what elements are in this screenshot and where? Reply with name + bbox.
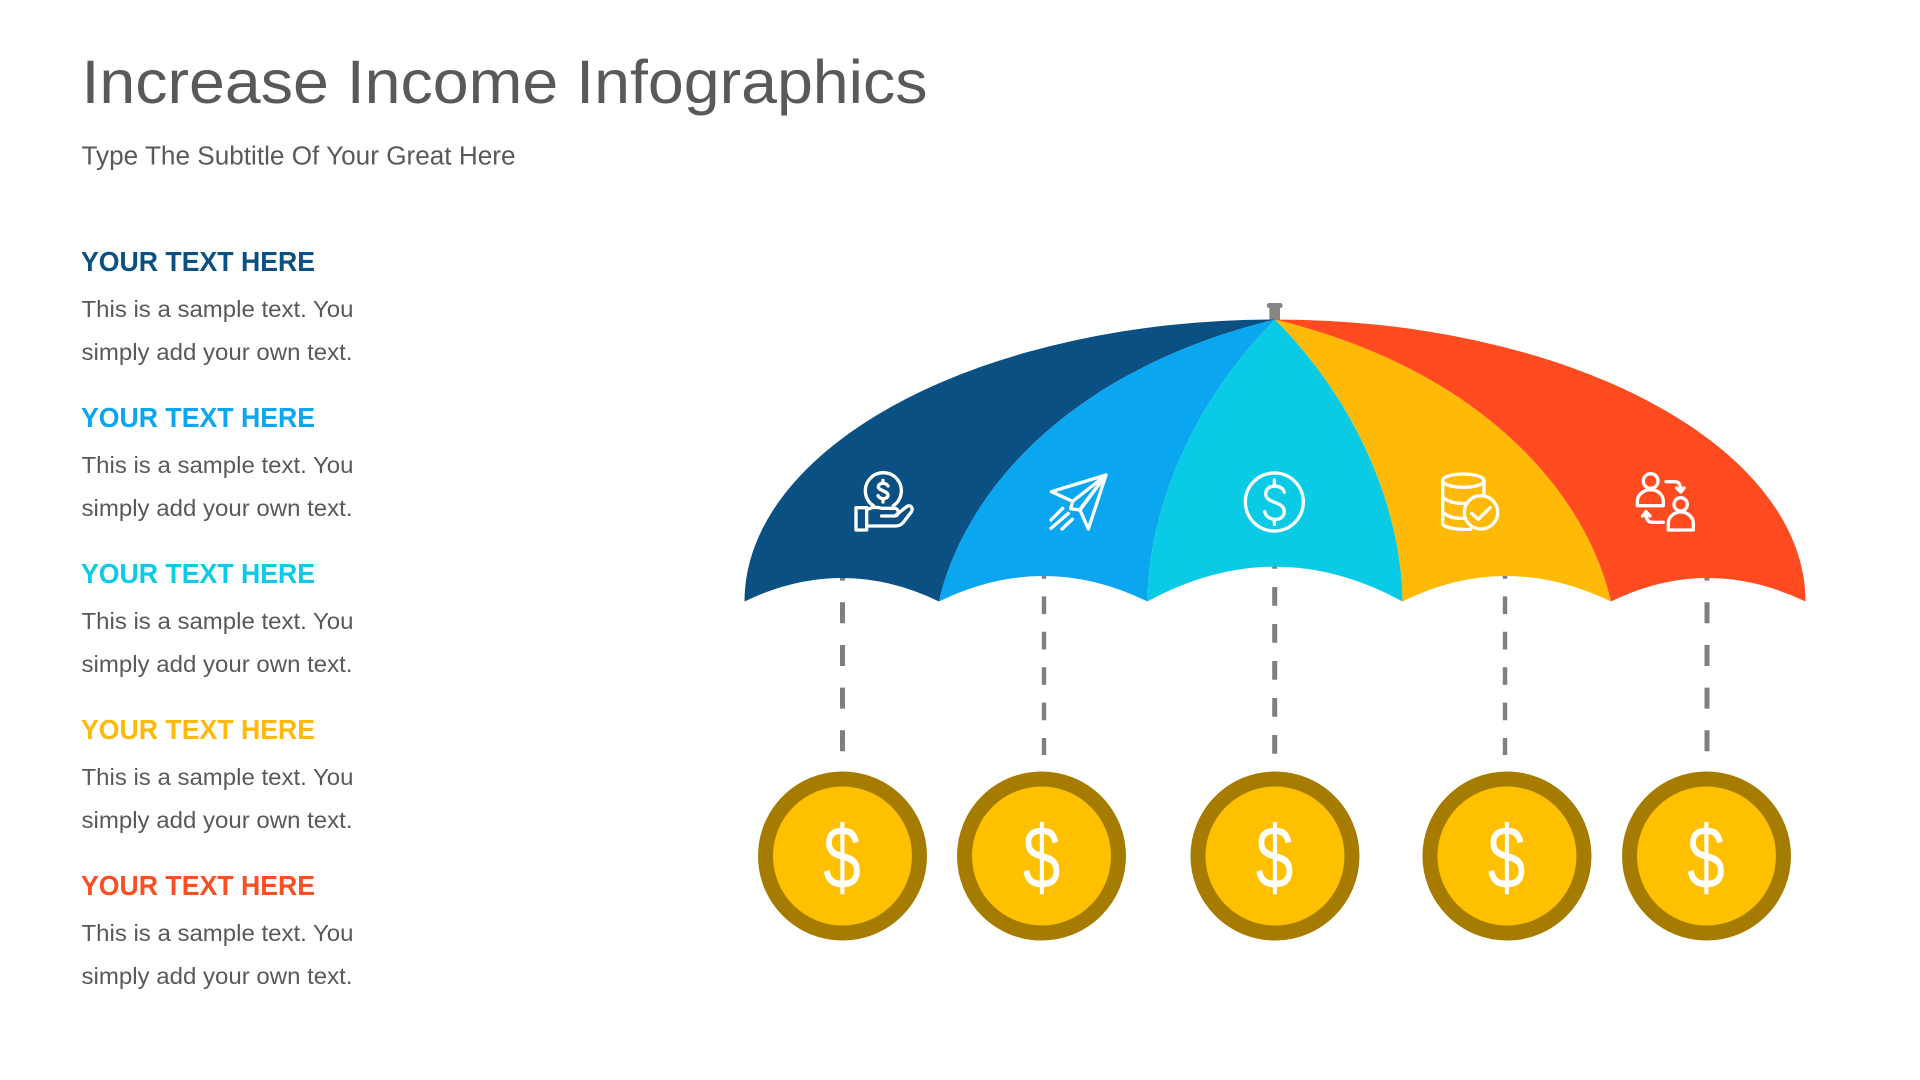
pin (1267, 303, 1283, 321)
heading 2: YOUR TEXT HERE (81, 402, 315, 433)
body text 4: This is a sample text. You (82, 764, 354, 790)
coin 2: $ (1023, 807, 1060, 907)
body text 5: simply add your own text. (82, 963, 352, 989)
heading 4: YOUR TEXT HERE (81, 714, 315, 745)
umbrella canopy (744, 303, 1806, 602)
subtitle: Type The Subtitle Of Your Great Here (82, 142, 516, 170)
body text 5: This is a sample text. You (82, 920, 354, 946)
body text 3: simply add your own text. (82, 651, 352, 677)
coin 3 (1198, 779, 1352, 933)
dashed strings (842, 566, 1707, 755)
coin 1: $ (823, 807, 861, 907)
body text 2: simply add your own text. (82, 495, 352, 521)
body text 3 (82, 608, 354, 677)
title: Increase Income Infographics (82, 48, 928, 116)
text block 3 (81, 558, 354, 677)
body text 1 (82, 296, 354, 365)
icon: dollar circle (1245, 473, 1303, 531)
icon: hand holding coin (856, 473, 912, 530)
icon: database with check (1443, 474, 1498, 529)
heading 1: YOUR TEXT HERE (81, 246, 315, 277)
panel: dark blue (744, 320, 1275, 602)
body text 4 (82, 764, 354, 833)
coin 5 (1630, 779, 1784, 933)
body text 4: simply add your own text. (82, 807, 352, 833)
text block 5 (81, 870, 354, 989)
body text 2 (82, 452, 354, 521)
text block 2 (81, 402, 354, 521)
icon: people exchange (1637, 474, 1693, 530)
coin 5: $ (1687, 807, 1725, 907)
icon: paper plane (1051, 475, 1106, 529)
text block 4 (81, 714, 354, 833)
coin 4 (1430, 779, 1584, 933)
panel: blue (939, 320, 1275, 602)
panel: red (1275, 320, 1806, 602)
coin 2 (964, 779, 1118, 933)
text block 1 (81, 246, 354, 365)
body text 1: simply add your own text. (82, 339, 352, 365)
body text 3: This is a sample text. You (82, 608, 354, 634)
body text 1: This is a sample text. You (82, 296, 354, 322)
heading 5: YOUR TEXT HERE (81, 870, 315, 901)
body text 5 (82, 920, 354, 989)
coin 4: $ (1488, 807, 1525, 907)
coin 1 (766, 779, 920, 933)
heading 3: YOUR TEXT HERE (81, 558, 315, 589)
panel: cyan (1148, 320, 1402, 602)
panel: amber (1275, 320, 1611, 602)
coin 3: $ (1256, 807, 1293, 907)
body text 2: This is a sample text. You (82, 452, 354, 478)
